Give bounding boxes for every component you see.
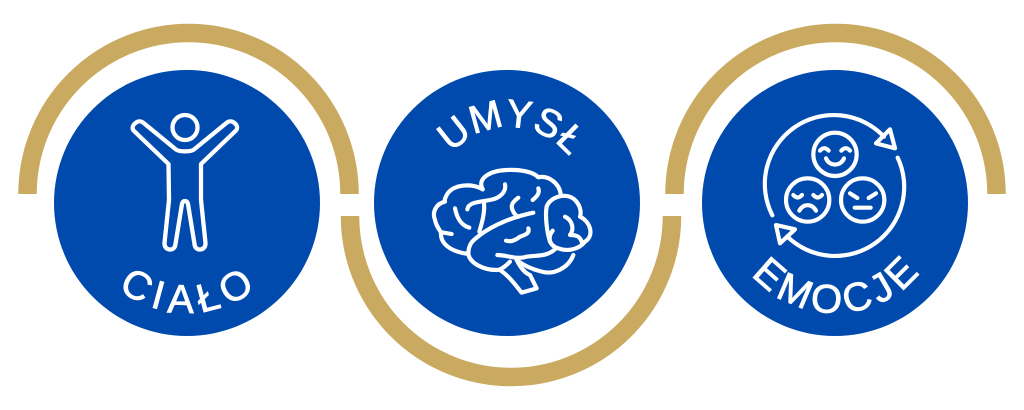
panel: emocje [702, 70, 968, 336]
label: emocje: EMOCJE [752, 255, 920, 314]
icon: angry face [841, 178, 884, 222]
arrow: upper cycle [765, 115, 895, 215]
gold arc: left [28, 33, 350, 194]
arrow: lower cycle [776, 158, 904, 256]
label: umysł: UMYSŁ [436, 99, 578, 156]
icon: brain [434, 170, 590, 293]
gold arc: middle [350, 216, 672, 377]
icon: person with raised arms [133, 115, 237, 250]
icon: happy face [813, 133, 857, 176]
panel: ciało [54, 70, 320, 336]
gold arc: right [674, 33, 996, 194]
blue circle: emocje [702, 70, 968, 336]
blue circle: umysł [374, 70, 640, 336]
label: ciało: CIAŁO [123, 270, 250, 314]
icon: emotion cycle [765, 115, 904, 256]
blue circle: ciało [54, 70, 320, 336]
panel: umysł [374, 70, 640, 336]
icon: sad face [786, 178, 829, 222]
